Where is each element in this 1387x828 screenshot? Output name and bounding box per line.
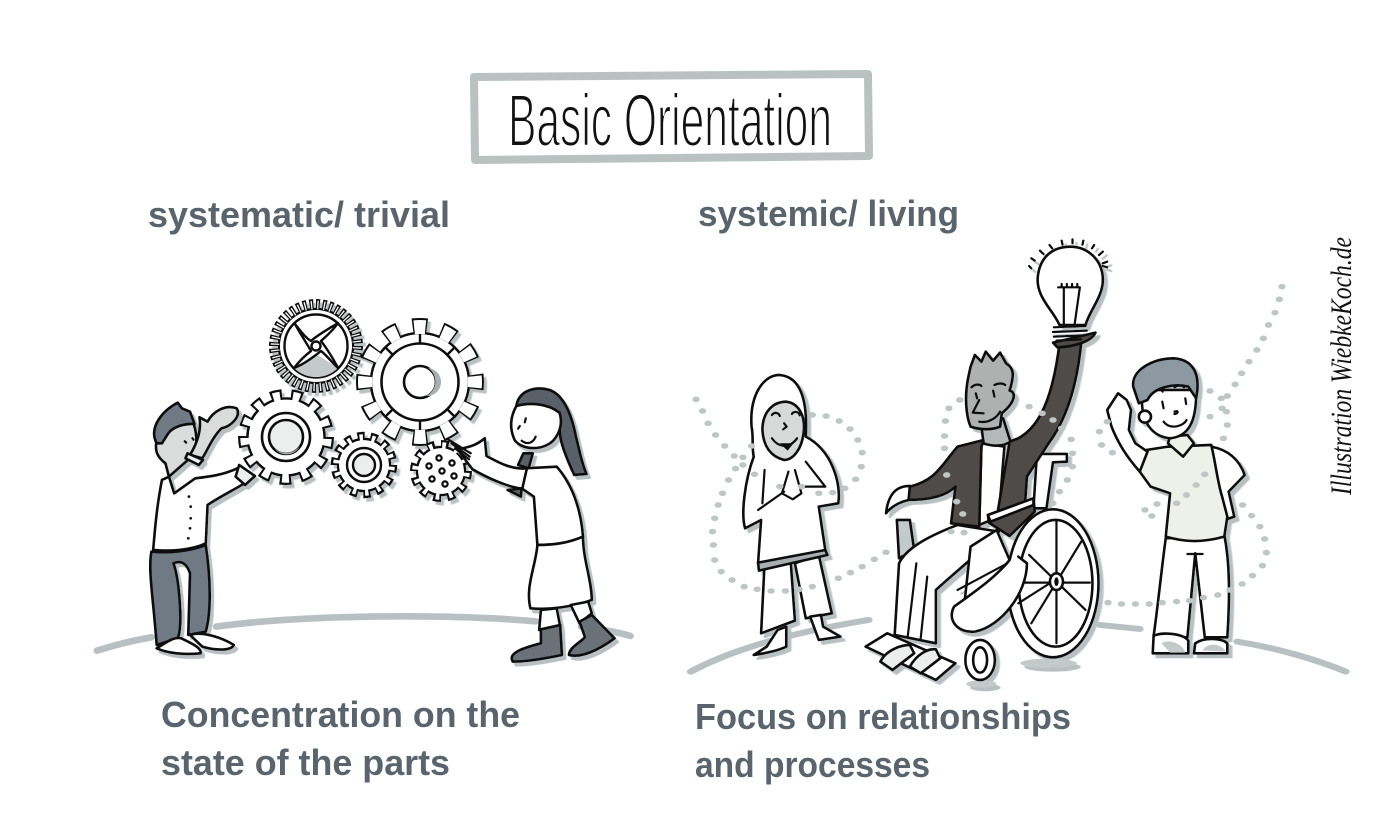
jacket and raised arm xyxy=(997,343,1081,518)
woman hem xyxy=(758,550,827,571)
figure: man in wheelchair xyxy=(866,239,1107,688)
raised arm xyxy=(1107,393,1148,472)
figure: man xyxy=(150,403,255,654)
hair xyxy=(1133,358,1198,403)
backrest tube xyxy=(897,520,914,558)
man shoes xyxy=(157,638,201,654)
dotted energy lines xyxy=(696,287,1282,604)
figure: woman with headscarf xyxy=(743,375,840,655)
head xyxy=(966,352,1014,429)
man face xyxy=(156,423,196,477)
caption: concentration on parts: state of the parts xyxy=(161,742,450,783)
gears xyxy=(243,304,476,498)
girl skirt xyxy=(529,537,592,609)
girl face xyxy=(511,404,561,448)
large wheel xyxy=(1007,509,1099,657)
title box: Basic Orientation xyxy=(508,79,832,162)
wheel shadows xyxy=(1020,659,1077,668)
heading: systematic trivial: systematic/ trivial xyxy=(148,194,450,235)
woman tunic xyxy=(743,375,839,563)
lap tray xyxy=(988,498,1035,536)
small front wheel xyxy=(965,640,995,680)
heading: systemic living: systemic/ living xyxy=(698,193,959,234)
light bulb xyxy=(1029,239,1107,341)
hand holding bulb xyxy=(1053,333,1095,347)
girl arm and hand xyxy=(458,438,527,489)
caption: focus on relationships xyxy=(695,696,1071,785)
title box xyxy=(474,74,869,162)
girl long hair xyxy=(516,389,587,475)
girl left braid xyxy=(518,453,533,468)
figure: girl xyxy=(448,389,615,662)
shirt xyxy=(1140,445,1227,541)
man buttons xyxy=(188,497,191,538)
gear: large with blocks xyxy=(364,326,476,438)
hip arm xyxy=(1211,447,1245,520)
caption: concentration on parts xyxy=(161,694,520,783)
caption: focus on relationships: and processes xyxy=(695,744,930,785)
gear: small with holes xyxy=(414,444,468,498)
credit: illustrator: Illustration WiebkeKoch.de xyxy=(1325,237,1358,496)
man shirt xyxy=(153,468,244,551)
man trousers xyxy=(150,545,210,645)
shirt xyxy=(979,443,1004,525)
woman praying hands xyxy=(758,462,825,510)
girl socks xyxy=(539,602,592,630)
girl boots xyxy=(512,625,562,662)
face xyxy=(1142,390,1196,438)
ground line right xyxy=(691,620,1346,672)
neck xyxy=(981,418,1010,446)
gear: left with ring xyxy=(243,394,329,480)
man raised hand xyxy=(190,407,238,458)
illustration: three people with light bulb xyxy=(691,239,1346,688)
man hair xyxy=(154,403,195,443)
gear: medium xyxy=(334,436,394,494)
collar xyxy=(1168,435,1194,457)
footrests and shoes xyxy=(866,633,955,680)
trousers xyxy=(1154,535,1229,637)
woman face xyxy=(762,402,804,460)
trousers xyxy=(895,525,999,643)
ground line left xyxy=(97,616,630,651)
illustration: people turning gears xyxy=(97,389,630,662)
lower hand xyxy=(886,486,910,513)
figure: waving man xyxy=(1107,358,1245,653)
frame tube xyxy=(952,557,1027,632)
shoes xyxy=(1153,634,1188,653)
caption: focus on relationships: Focus on relationships xyxy=(695,696,1071,737)
armrest xyxy=(1033,454,1067,508)
caption: concentration on parts: Concentration on the xyxy=(161,694,520,735)
gear: fine teeth top xyxy=(274,304,358,388)
woman trousers xyxy=(761,555,832,633)
girl dress top xyxy=(522,467,583,545)
woman feet xyxy=(754,615,840,655)
